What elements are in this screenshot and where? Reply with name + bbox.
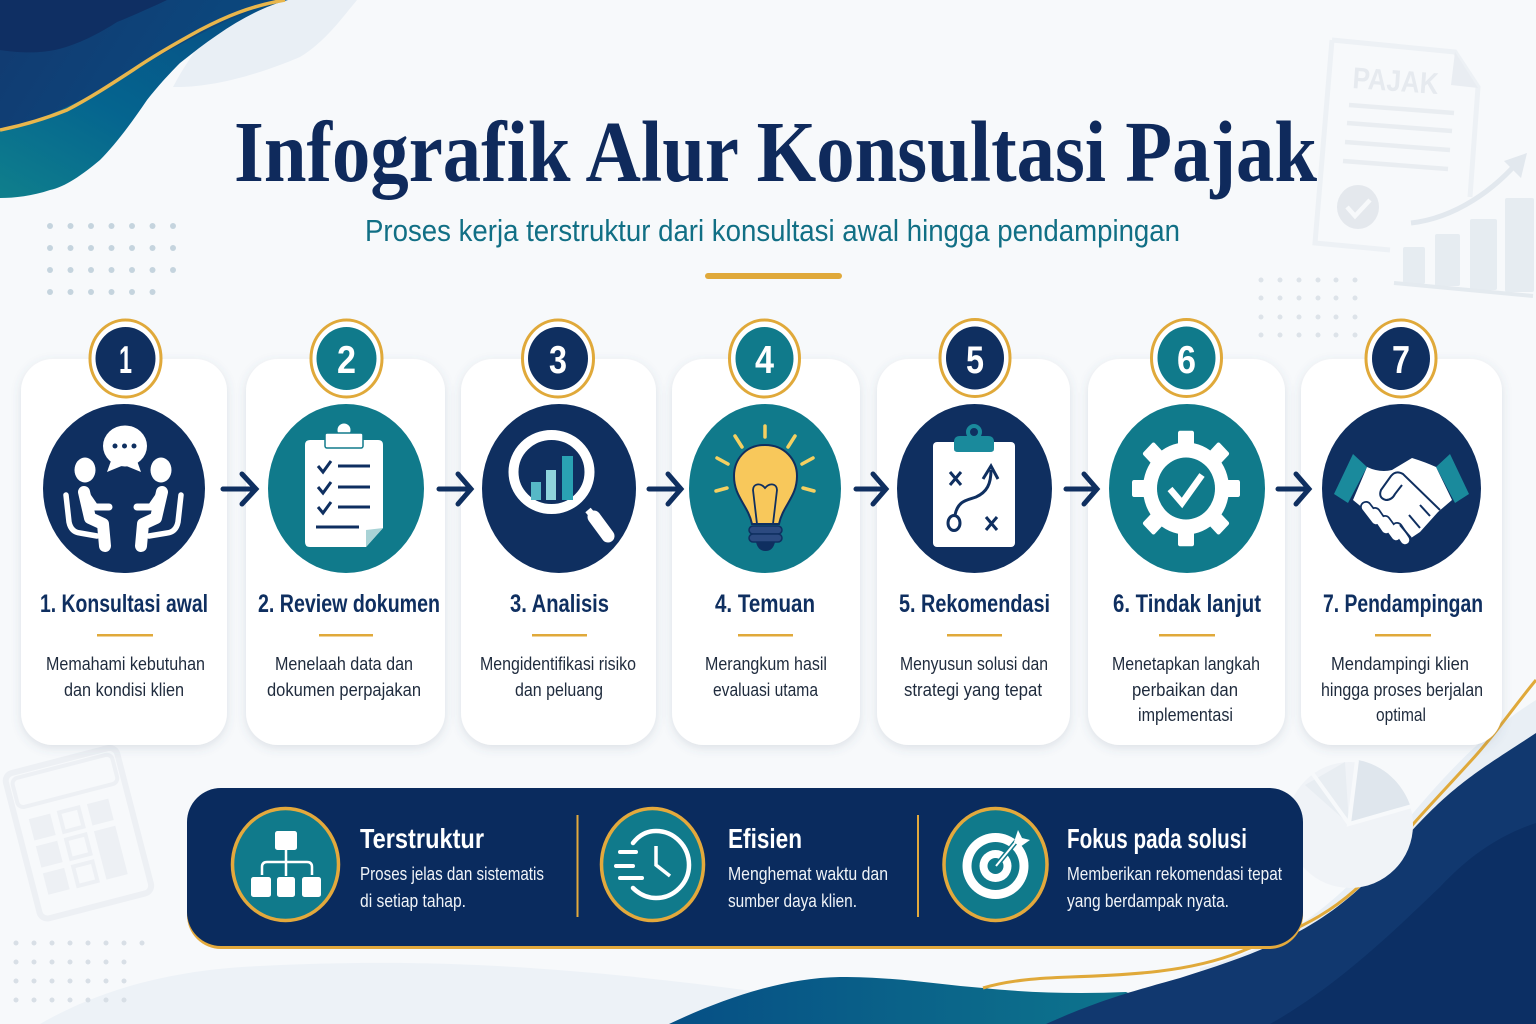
step 1 heading: 1. Konsultasi awal (40, 590, 208, 618)
number badge 4: 4 (755, 339, 774, 382)
arrow 6 to 7 (1278, 474, 1309, 504)
benefit 2 text: sumber daya klien. (728, 890, 857, 911)
benefit 2 text: Efisien (728, 823, 802, 854)
panel: step 4 (672, 320, 860, 745)
benefit 3 text: Fokus pada solusi (1067, 823, 1247, 854)
step 7 description: optimal (1376, 704, 1426, 725)
icon: strategy board (897, 404, 1052, 573)
step 6 underline (1159, 634, 1215, 636)
step 7 description: hingga proses berjalan (1321, 679, 1483, 700)
step 5 description: Menyusun solusi dan (900, 653, 1048, 674)
step 4 description: Merangkum hasil (705, 653, 827, 674)
icon: handshake (1322, 404, 1481, 573)
step 7 description (1321, 653, 1483, 725)
watermark: tax document (1315, 40, 1478, 250)
number badge 3: 3 (549, 339, 567, 382)
watermark: growth chart (1394, 153, 1534, 296)
title: Infografik Alur Konsultasi Pajak (234, 103, 1318, 200)
icon: structure (232, 808, 338, 920)
panel: step 2 (246, 320, 445, 745)
step 3 underline (532, 634, 587, 636)
step 2 heading: 2. Review dokumen (258, 590, 440, 618)
step 6 description: perbaikan dan (1132, 679, 1238, 700)
step 4 description (705, 653, 827, 700)
step 3 description (480, 653, 636, 700)
step 3 description: dan peluang (515, 679, 603, 700)
benefit 2 text: Menghemat waktu dan (728, 863, 888, 884)
step 7 underline (1375, 634, 1431, 636)
icon: fast clock (602, 808, 704, 920)
panel: step 1 (21, 320, 227, 745)
step 2 description: Menelaah data dan (275, 653, 413, 674)
watermark: pie chart (1287, 760, 1413, 888)
panel: step 6 (1088, 320, 1285, 745)
panel: step 7 (1301, 320, 1502, 745)
dots: top right (1258, 278, 1358, 338)
subtitle: Proses kerja terstruktur dari konsultasi awal hingga pendampingan (365, 213, 1180, 248)
step 7 description: Mendampingi klien (1331, 653, 1469, 674)
arrow 2 to 3 (439, 474, 471, 504)
arrow 5 to 6 (1066, 474, 1097, 504)
step 6 description: implementasi (1138, 704, 1233, 725)
panel: step 3 (461, 320, 656, 745)
step 3 heading: 3. Analisis (510, 590, 609, 618)
step 2 underline (319, 634, 373, 636)
icon: target (944, 808, 1047, 920)
benefit 1 text: di setiap tahap. (360, 890, 466, 911)
number badge 5: 5 (966, 339, 984, 382)
step 5 description: strategi yang tepat (904, 679, 1042, 700)
arrow 1 to 2 (223, 474, 256, 504)
step 6 description: Menetapkan langkah (1112, 653, 1260, 674)
number badge 1: 1 (119, 339, 132, 382)
icon: magnifier with chart (482, 404, 636, 573)
number badge 2: 2 (337, 339, 356, 382)
watermark: calculator (4, 746, 153, 920)
step 3 description: Mengidentifikasi risiko (480, 653, 636, 674)
watermark: tax document: PAJAK (1352, 62, 1440, 101)
step 1 description (46, 653, 205, 700)
number badge 1 (90, 320, 161, 397)
benefit 3 text (1067, 823, 1282, 911)
number badge 7 (1366, 320, 1436, 397)
icon: consultation (43, 404, 205, 573)
number badge 2 (311, 320, 382, 397)
icon: light bulb (689, 404, 841, 573)
number badge 6 (1152, 320, 1222, 396)
decorative wave: top left (0, 0, 357, 198)
benefit 3 text: yang berdampak nyata. (1067, 890, 1229, 911)
step 5 underline (947, 634, 1002, 636)
decorative wave: bottom right (40, 680, 1536, 1024)
step 2 description: dokumen perpajakan (267, 679, 421, 700)
step 4 underline (738, 634, 793, 636)
step 5 description (900, 653, 1048, 700)
dots: top left (47, 223, 176, 295)
benefit 1 text: Proses jelas dan sistematis (360, 863, 544, 884)
step 1 description: dan kondisi klien (64, 679, 184, 700)
dots: bottom left (14, 940, 144, 1002)
step 7 heading: 7. Pendampingan (1323, 590, 1483, 618)
step 2 description (267, 653, 421, 700)
arrow 3 to 4 (649, 474, 681, 504)
step 1 underline (97, 634, 153, 636)
icon: gear with check (1109, 404, 1265, 573)
arrow 4 to 5 (856, 474, 886, 504)
step 1 description: Memahami kebutuhan (46, 653, 205, 674)
benefit 2 text (728, 823, 888, 911)
number badge 3 (522, 320, 594, 397)
title accent bar (705, 273, 842, 279)
number badge 7: 7 (1392, 339, 1410, 382)
step 6 heading: 6. Tindak lanjut (1113, 590, 1262, 618)
icon: checklist clipboard (268, 404, 424, 573)
number badge 4 (730, 320, 800, 397)
step 4 description: evaluasi utama (713, 679, 819, 700)
step 4 heading: 4. Temuan (715, 590, 815, 618)
benefit 3 text: Memberikan rekomendasi tepat (1067, 863, 1282, 884)
number badge 6: 6 (1177, 339, 1196, 382)
panel: step 5 (877, 320, 1070, 745)
benefit 1 text (360, 823, 544, 911)
step 6 description (1112, 653, 1260, 725)
panel: benefits (187, 788, 1303, 949)
number badge 5 (940, 320, 1010, 396)
benefit 1 text: Terstruktur (360, 823, 484, 854)
step 5 heading: 5. Rekomendasi (899, 590, 1050, 618)
